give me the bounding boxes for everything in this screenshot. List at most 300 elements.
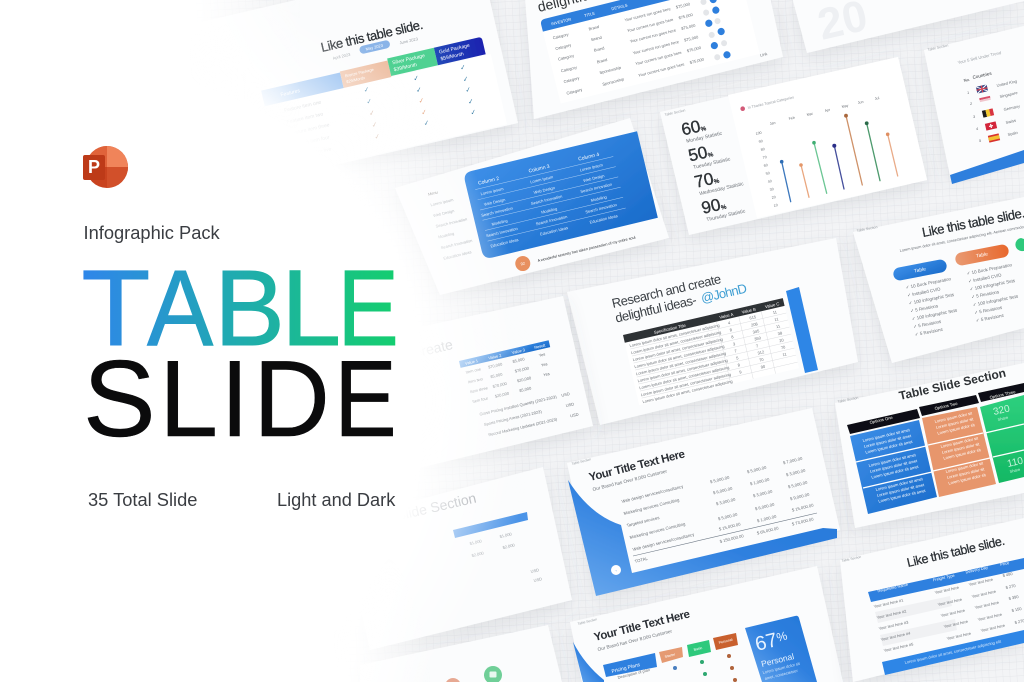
slide preview: statistics and lollipop chart: Table Section [664, 108, 686, 117]
chart axes labels: 60 [763, 163, 768, 168]
slide preview: bottom right table: Your text here [977, 612, 1003, 622]
chart axes labels: Jul [874, 96, 880, 101]
slide preview: faded small table: Record Marketing Updates (2021-2023) [488, 416, 558, 437]
slide preview: your title text with values: Marketing services Consulting [623, 497, 680, 516]
list: orange table features: ✓ 5 Revisions [974, 305, 1003, 315]
slide preview: statistics and lollipop chart: 70% [693, 168, 721, 192]
slide preview: your title text with values: $ 3,000.00 [752, 489, 773, 498]
list: blue table features: ✓ 5 Revisions [913, 319, 942, 329]
list: blue table features: ✓ 100 infographic Sets [911, 308, 958, 321]
text: light and dark: Light and Dark [277, 490, 396, 510]
slide preview: table slide section: Lorem ipsum dolor sit [934, 410, 973, 424]
chart axes labels: Jan [769, 121, 776, 126]
slide preview: bottom right table: Your text here [934, 585, 960, 595]
slide preview: investor table: $75,000 [686, 45, 702, 53]
slide preview: pricing plans: % [775, 628, 789, 645]
column headers: Options Two [934, 401, 958, 411]
slide preview: investor table: $75,000 [689, 56, 705, 65]
slide preview: country table: No. [963, 77, 970, 83]
slide preview: investor table: Brand [588, 24, 600, 31]
slide preview: like this table (pricing checks): May 2023 [365, 43, 384, 52]
slide preview: research and create table: 9 [739, 369, 743, 375]
slide preview: research and create table: 615 [749, 314, 757, 321]
slide preview: table slide section: Lorem ipsum dolor sit [935, 416, 975, 430]
slide preview: table slide section: Share [1009, 467, 1021, 474]
icon: PowerPoint logo [83, 146, 128, 188]
plan dots [673, 654, 737, 682]
slide preview: like this table (pricing checks): ✓ [371, 120, 378, 130]
heading: TABLE [81, 247, 399, 369]
slide preview: pricing plans [570, 566, 843, 682]
slide preview: research and create table: Specification Title [653, 323, 687, 335]
slide preview: bottom right table: Your text here [943, 619, 969, 629]
heading: SLIDE: E [334, 339, 397, 460]
slide preview: pricing plans: Table Section [577, 617, 598, 626]
slide preview: blue column table: Web Design [433, 208, 455, 218]
slide preview: large pale number [792, 0, 1024, 53]
slide preview: research and create table: 20 [779, 337, 785, 343]
slide preview: bottom right table: $ 480 [1002, 571, 1014, 578]
pill: orange table: Table [976, 251, 989, 260]
pill: blue table [892, 258, 948, 282]
slide preview: your title text with values: $ 73,000.00 [791, 516, 815, 527]
slide preview: your title text with values: $ 5,000.00 [746, 465, 767, 474]
slide preview: country table: 5 [979, 138, 982, 143]
slide preview: blue column table: Search Innovation [585, 202, 617, 214]
slide preview: bottom right table: Your text here [940, 608, 966, 618]
slide preview: faded small table: USD [565, 401, 575, 408]
slide preview: table slide section: Lorem ipsum dolor sit amet [863, 433, 912, 449]
slide preview: research and create table: 350 [754, 335, 762, 342]
heading: TABLE: E [338, 248, 399, 369]
heading: TABLE: T [81, 248, 150, 368]
slide preview: country table: Singapore [999, 90, 1019, 99]
slide preview: investor table: Category [552, 32, 569, 40]
slide preview: pricing plans: amet, consectetuer [764, 668, 799, 681]
slide preview: country table: 4 [976, 126, 979, 131]
slide preview: bottom right table: Requested Name [877, 582, 909, 593]
slide preview: your title text with values: $ 3,000.00 [715, 497, 736, 506]
slide preview: pricing plans: Our Brand has Over 8,000 Customer [597, 628, 673, 652]
slide preview: like this table (pricing checks): Feature item four [292, 135, 330, 149]
slide preview: table slide section: 110 [1006, 456, 1024, 470]
list: blue table features: ✓ 100 infographic Sets [908, 292, 955, 306]
heading: SLIDE: S [83, 339, 156, 460]
slide preview: bottom right table: Your text here #2 [876, 608, 908, 620]
slide preview: bottom right table: Table Section [841, 555, 862, 563]
slide preview: investor table: Your current run goes here [624, 6, 672, 22]
list: orange table features: ✓ 100 infographic Sets [969, 278, 1016, 292]
slide preview: table slide section: Lorem ipsum dolor sit [946, 466, 986, 480]
slide preview: like this table (pricing checks): Features [280, 88, 301, 98]
slide preview: bottom right table: Your text here #1 [873, 597, 905, 609]
chart axes labels: 90 [758, 139, 763, 144]
slide preview: blue column table: A wonderful serenity has taken possession of my entire soul [537, 236, 636, 263]
column headers: Options Three [989, 389, 1017, 400]
slide preview: investor table: Your current run goes here [632, 39, 680, 55]
slide preview: blue column table: Column 3 [528, 164, 551, 175]
pill: blue table: Table [914, 266, 927, 275]
slide preview: like this table (pricing checks): ✓ [415, 86, 423, 95]
heading: SLIDE: L [159, 338, 218, 459]
slide preview: like this table (pricing checks): ✓ [423, 119, 430, 128]
blue column [850, 420, 937, 514]
slide preview: like this table (pricing checks): Feature item three [289, 122, 330, 137]
slide preview: research and create table: 3 [732, 341, 736, 347]
slide preview: table slide section: Lorem ipsum dolor sit [941, 441, 981, 455]
slide preview: statistics and lollipop chart: Tuesday Statistic [693, 156, 732, 171]
slide preview: investor table: Category [566, 87, 583, 96]
subtitle: infographic pack: Infographic Pack [84, 222, 221, 243]
slide preview: faded section table: $2,000 [502, 542, 516, 550]
plan header cells [603, 653, 657, 677]
slide preview: statistics and lollipop chart: Thursday Statistic [706, 208, 746, 223]
slide preview: research and create table: 8 [737, 362, 741, 368]
slide preview: your title text with values: Your Title Text Here [588, 449, 686, 484]
slide preview: bottom right table: $ 390 [1008, 594, 1020, 601]
slide preview: investor table: Category [560, 65, 577, 73]
slide preview: bottom right table: $ 270 [1005, 583, 1017, 590]
chart panel [728, 57, 927, 218]
slide preview: faded small table: Item two [467, 376, 484, 384]
slide preview: investor table: Your current run goes here [629, 27, 677, 44]
slide preview: investor table: $75,000 [681, 22, 697, 31]
slide preview: blue column table: Search Innovation [580, 182, 612, 194]
slide preview: blue column table: Education Ideas [490, 237, 519, 249]
slide preview: faded small table: $5,000 [512, 356, 526, 364]
slide preview: research and create table: @JohnD [699, 281, 748, 306]
slide preview: pricing plans: Personal [718, 638, 733, 645]
slide preview: investor table: Sponsorship [602, 76, 625, 87]
slide preview: investor table: Link [759, 51, 768, 58]
slide preview: research and create table: Value B [741, 306, 756, 315]
chart axes labels: 80 [760, 147, 765, 152]
slide preview: research and create table: 208 [751, 321, 759, 328]
slide preview: like this table with pills: Like this table slide. [921, 205, 1024, 240]
slide preview: bottom right table: Your text here [974, 600, 1000, 610]
slide preview: research and create table: Lorem ipsum dolor sit amet, consectetuer adipiscing [640, 372, 731, 397]
slide preview: faded small table: Value 2 [488, 353, 503, 361]
slide preview: faded small table: Item one [465, 366, 482, 375]
heading: TABLE: B [214, 247, 285, 368]
slide preview: statistics and lollipop chart [660, 57, 927, 235]
slide preview: faded small table: USD [570, 412, 579, 418]
slide preview: bottom right table: Like this table slide. [906, 534, 1006, 570]
slide preview: research and create table: Lorem ipsum dolor sit amet, consectetuer adipiscing [632, 337, 723, 362]
slide preview: like this table (pricing checks): ✓ [462, 75, 470, 84]
slide preview: country table: Spain [1007, 130, 1018, 137]
slide preview: like this table (pricing checks): ✓ [374, 132, 381, 141]
slide preview: country table: 2 [970, 101, 973, 106]
slide preview: blue column table: Web Design [483, 197, 506, 207]
list: orange table features: ✓ 5 Revisions [975, 313, 1005, 323]
slide preview: bottom right table: Freight Type [932, 573, 956, 582]
slide preview: faded small table: Value 1 [465, 358, 479, 366]
chart axes labels: Jun [857, 100, 864, 105]
green column [980, 395, 1024, 483]
slide preview: bottom right table: Your text here [980, 623, 1006, 633]
slide preview: research and create table: Lorem ipsum dolor sit amet, consectetuer adipiscing [637, 358, 728, 383]
slide preview: your title text with values: Our Brand has Over 8,000 Customer [592, 468, 668, 492]
slide preview: faded section table [340, 467, 572, 650]
slide preview: faded small table: Yes [538, 352, 546, 358]
slide preview: faded section table: $1,000 [469, 538, 483, 546]
slide preview: investor table: Category [563, 75, 580, 84]
slide preview: like this table (pricing checks): April 2023 [332, 52, 352, 61]
slide preview: blue column table: Search Innovation [435, 216, 468, 229]
slide preview: research and create table: Value C [764, 301, 780, 309]
slide preview: blue column table: Search Innovation [530, 194, 563, 206]
slide preview: bottom right table: $ 150 [1011, 606, 1023, 613]
chart axes labels: 50 [765, 171, 770, 176]
slide preview: table slide section: Lorem ipsum dolor sit [943, 447, 982, 461]
slide preview: research and create table: 345 [752, 328, 761, 335]
slide preview: your title text with values: TOTAL [634, 556, 649, 564]
slide preview: your title text with values: $ 15,000.00 [718, 521, 742, 532]
slide preview: table slide section: Lorem ipsum dolor sit amet [876, 482, 925, 498]
slide preview: your title text with values: $ 15,000.00 [791, 502, 815, 513]
slide preview: research and create table: 4 [727, 320, 731, 326]
slide preview: pricing plans: Your Title Text Here [593, 609, 691, 644]
slide preview: investor table: Category [555, 42, 572, 51]
slide preview: faded section table: $2,000 [471, 550, 485, 558]
list: blue table features: ✓ Installed CV/D [907, 286, 942, 298]
slide preview: blue column table: Lorem Ipsum [430, 197, 454, 207]
slide preview: your title text with values: Marketing services Consulting [629, 521, 686, 540]
slide preview: bottom right table: Your text here [971, 589, 997, 599]
chart axes labels: May [841, 104, 849, 109]
pill: green table [1015, 238, 1024, 251]
slide preview: research and create table: Lorem ipsum dolor sit amet, consectetuer adipiscing [634, 344, 725, 369]
pill: orange table [954, 243, 1010, 267]
slide preview: faded section table: $1,000 [499, 531, 513, 539]
slide preview: research and create table: Lorem ipsum dolor sit amet, consectetuer adipiscing [631, 330, 722, 355]
slide preview: blue column table: 92 [520, 260, 526, 266]
slide preview: like this table (pricing checks): Feature item one [284, 100, 322, 114]
slide preview: investor table [525, 0, 795, 119]
slide preview: like this table with pills: Table Section [856, 225, 878, 233]
slide preview: blue column table: Lorem Ipsum [530, 174, 554, 184]
slide preview: your title text with values: Web design services/consultancy [621, 484, 685, 504]
chart legend: In Thanks Topical Categories [747, 95, 795, 110]
slide preview: investor table: Your current run goes here [635, 50, 683, 66]
slide preview: bottom right table: Your text here [937, 597, 963, 607]
slide preview: blue column table: Modeling [541, 206, 558, 215]
heading: TABLE: A [147, 247, 213, 368]
slide preview: table slide section: Lorem ipsum dolor sit [948, 472, 987, 486]
chart axes labels: Feb [788, 116, 795, 121]
slide preview: investor table: INVESTOR [551, 17, 572, 26]
slide preview: your title text with values: $ 3,000.00 [785, 468, 806, 477]
slide preview: research and create table: 11 [774, 316, 780, 322]
slide preview: your title text with values: $ 5,000.00 [717, 512, 738, 521]
slide preview: like this table (pricing checks): ✓ [459, 63, 467, 72]
chart axes labels: 30 [769, 187, 774, 192]
slide preview: investor table: Sponsorship [599, 65, 622, 75]
slide preview: research and create table: 11 [782, 351, 788, 357]
slide preview: your title text with values: $ 5,000.00 [787, 480, 808, 489]
slide preview: bottom right table: Your text here #5 [883, 641, 915, 653]
slide preview: your title text with values: $ 5,000.00 [709, 475, 730, 484]
chart axes labels: 70 [762, 155, 767, 160]
slide preview: faded small table: $70,000 [492, 381, 508, 389]
slide preview: like this table (pricing checks): $39/Month [393, 62, 418, 73]
slide preview: investor table: Your current run goes here [638, 61, 686, 78]
slide preview: like this table (pricing checks): $59/Month [440, 51, 465, 62]
slide preview: pricing plans: Lorem ipsum dolor sit [762, 661, 801, 675]
slide preview: research and create table: 38 [777, 330, 783, 336]
slide preview: faded small table: $20,000 [516, 375, 532, 383]
list: blue table features: ✓ 10 Book Preparation [905, 276, 952, 290]
lollipop bars [780, 114, 898, 202]
slide preview: research and create table: Value A [719, 312, 734, 320]
slide preview: your title text with values: $ 65,000.00 [756, 525, 780, 536]
slide preview: research and create table: delightful ideas- [614, 292, 698, 326]
slide preview: like this table (pricing checks): $29/Month [346, 75, 365, 84]
slide preview: bottom right table: Your text here [968, 577, 994, 587]
list: orange table features [966, 262, 1022, 323]
slide preview: like this table (pricing checks): ✓ [420, 108, 428, 117]
slide preview: table slide section: Share [997, 415, 1009, 422]
chart axes labels: 10 [773, 203, 778, 208]
slide preview: your title text with values: $ 6,000.00 [712, 486, 733, 495]
heading: SLIDE: I [221, 339, 249, 460]
slide preview: faded section table: Table Slide Section [358, 490, 478, 532]
slide preview: pricing plans: Starter [664, 652, 676, 659]
flags [976, 84, 1000, 143]
slide preview: country table: United King [996, 78, 1017, 88]
slide preview: table slide section: Table Section [837, 396, 859, 404]
slide preview: blue column table: Search Innovation [486, 226, 518, 238]
heading: SLIDE [83, 338, 397, 460]
chart axes labels: Mar [806, 112, 814, 117]
slide preview: like this table (pricing checks): Gold Package [438, 43, 471, 56]
slide preview: research and create table: Lorem ipsum dolor sit amet, consectetuer adipiscing [629, 323, 720, 348]
slide preview: bottom right table: Your text here #3 [878, 619, 910, 631]
slide preview: blue column table: Education Ideas [539, 225, 569, 237]
slide preview: table slide section [835, 363, 1024, 528]
slide preview: table slide section: Lorem ipsum dolor sit [937, 422, 976, 436]
slide preview: faded small table: Sports Pricing Areas (2021-2023) [483, 409, 543, 427]
slide preview: faded small table: Research and create [324, 336, 455, 381]
list: orange table features: ✓ 100 infographic Sets [972, 294, 1019, 307]
slide preview: investor table: $75,000 [675, 1, 691, 10]
slide preview: blue column table: Menu [427, 189, 438, 197]
slide preview: like this table (pricing checks): ✓ [366, 97, 373, 106]
slide preview: blue column table: Lorem Ipsum [480, 186, 505, 196]
slide preview: like this table (pricing checks): ✓ [363, 85, 370, 94]
slide preview: table slide section: Lorem ipsum dolor sit amet [875, 476, 924, 492]
slide preview: like this table with pills: Lorem ipsum dolor sit amet, consectetuer adipiscing elit. Aenean commodo [899, 225, 1024, 253]
slide preview: country table: Swiss [1005, 118, 1016, 125]
slide preview: blue column table: Search Innovation [535, 214, 568, 226]
slide preview: research and create table: 11 [772, 309, 778, 315]
slide preview: like this table (pricing checks): ✓ [368, 109, 376, 118]
slide preview: pricing plans: Basic [693, 646, 703, 652]
slide preview: investor table: Brand [593, 45, 605, 53]
slide preview: research and create table [567, 238, 858, 425]
slide preview: bottom right table: Delivery Day [965, 565, 988, 574]
text: 35 total slide: 35 Total Slide [88, 489, 197, 510]
slide preview: research and create table: Lorem ipsum dolor sit amet, consectetuer adipiscing [636, 351, 727, 376]
slide preview: investor table: $75,000 [678, 12, 694, 20]
slide preview: your title text with values: $ 9,000.00 [789, 492, 810, 501]
slide preview: investor table: $75,000 [684, 34, 700, 43]
slide preview: your title text with values: $ 6,000.00 [754, 502, 775, 511]
slide preview: like this table (pricing checks): ✓ [464, 86, 472, 95]
chart axes labels: 20 [771, 195, 776, 200]
slide preview: bottom right table: Lorem ipsum dolor sit amet, consectetuer adipiscing elit [904, 639, 1002, 665]
slide preview: table slide section: Lorem ipsum dolor sit amet [878, 488, 927, 504]
slide preview: country table: 1 [967, 90, 970, 95]
slide preview: bottom right table: Your text here [946, 631, 972, 641]
slide preview: table slide section: Lorem ipsum dolor sit amet [862, 427, 911, 443]
slide preview: blue column table: Column 2 [478, 176, 500, 187]
slide preview: like this table (pricing checks): ✓ [413, 74, 420, 83]
slide preview: research and create table: Lorem ipsum dolor sit amet, consectetuer adipiscing [642, 379, 733, 404]
slide preview: investor table: DETAILS [611, 2, 628, 11]
icon: PowerPoint logo: P [88, 157, 100, 177]
heading: TABLE: L [281, 247, 341, 368]
slide preview: blue column table: Education Ideas [443, 249, 472, 261]
slide preview: investor table: TITLE [584, 11, 596, 18]
chart axes labels: 40 [767, 179, 772, 184]
list: blue table features: ✓ 5 Revisions [910, 303, 939, 314]
slide preview: research and create table: 70 [780, 344, 787, 350]
slide preview: like this table (pricing checks): Feature item five [294, 146, 332, 161]
slide preview: pricing plans: Pricing Plans [611, 662, 641, 675]
slide preview: table slide section: Lorem ipsum dolor sit amet [871, 464, 920, 480]
slide preview: blue column table: Web Design [533, 185, 555, 195]
personal percent panel [745, 616, 817, 682]
slide preview: country table: Germany [1003, 103, 1020, 112]
slide preview: statistics and lollipop chart: 90% [700, 194, 728, 218]
slide preview: faded small table: Value 3 [511, 347, 526, 355]
slide preview: bottom right table [840, 518, 1024, 682]
slide preview: blue column table: Search Innovation [481, 205, 513, 218]
slide preview: country table: Table Section [927, 43, 949, 52]
slide preview: table slide section: Lorem ipsum dolor sit amet [865, 439, 914, 455]
slide preview: blue column table: Modeling [491, 218, 508, 227]
slide preview: country table [924, 26, 1024, 184]
slide preview: faded small table: USD [561, 391, 570, 398]
orange column [922, 407, 996, 497]
slide preview: your title text with values: $ 1,000.00 [749, 477, 770, 486]
slide preview: like this table with pills [853, 197, 1024, 363]
slide preview: blue column table [395, 118, 669, 295]
slide preview: bottom right table: Your text here #4 [880, 630, 912, 642]
slide preview: faded small table: Gross Pricing Installed Quantity (2021-2023) [479, 394, 558, 417]
slide preview: country table: Your 5 Sell Under Trend [957, 50, 1002, 65]
column headers: Options One [869, 415, 894, 425]
slide preview: table slide section: 320 [992, 403, 1011, 418]
slide preview: like this table (pricing checks): Bronze Package [344, 67, 375, 78]
slide preview: research and create table: 11 [776, 323, 781, 329]
slide preview: country table: 3 [973, 114, 976, 119]
slide preview: research and create table: Lorem ipsum dolor sit amet, consectetuer adipiscing [639, 365, 730, 390]
slide preview: faded small table: Item three [470, 385, 489, 394]
slide preview: like this table (pricing checks): Like this table slide. [319, 17, 424, 55]
list: orange table features: ✓ 5 Revisions [971, 289, 1000, 300]
slide preview: faded small table: Yes [540, 361, 548, 368]
slide preview: blue column table: Web Design [583, 173, 605, 183]
slide preview: research and create table: 8 [729, 327, 733, 333]
slide preview: research and create table: 90 [760, 364, 766, 370]
slide preview: table slide section: Lorem ipsum dolor sit amet [869, 458, 918, 474]
slide preview: like this table (pricing checks): ✓ [470, 108, 477, 117]
slide preview: statistics and lollipop chart: 50% [687, 141, 715, 165]
slide preview: your title text with values: $ 7,000.00 [782, 456, 803, 465]
